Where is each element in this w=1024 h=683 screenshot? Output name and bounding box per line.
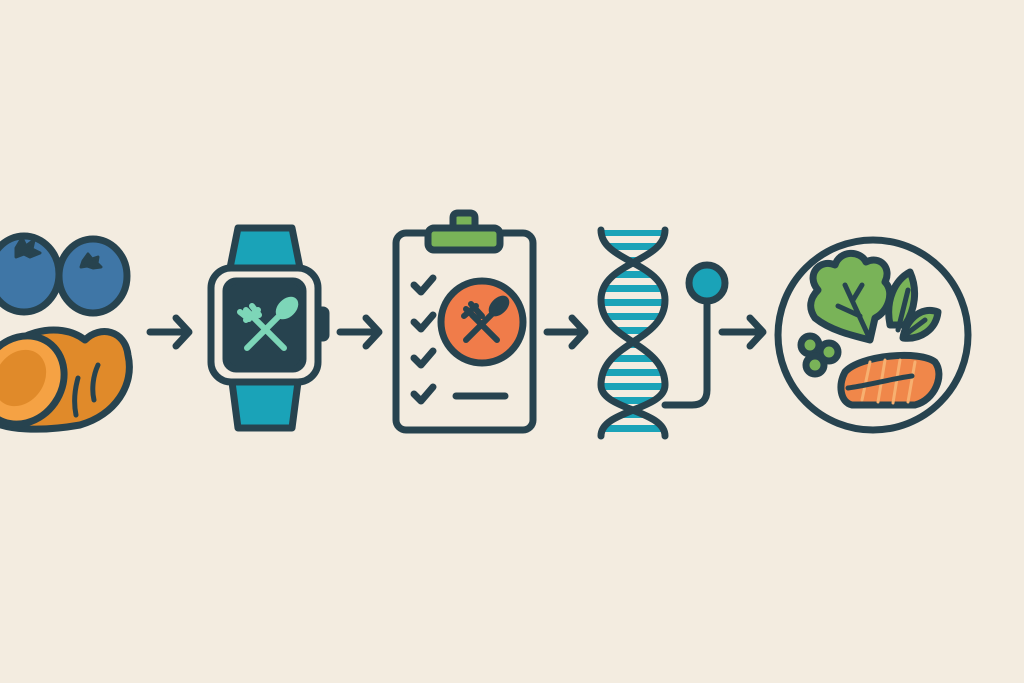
salmon: [841, 355, 939, 405]
arrow 1: [150, 318, 189, 346]
arrow 3: [547, 318, 585, 346]
fork and spoon: [240, 297, 298, 348]
icon: smartwatch: [211, 228, 326, 428]
blueberry left: [0, 236, 59, 312]
peas: [801, 336, 819, 354]
sweet potato: [0, 319, 129, 441]
greens: [811, 253, 890, 340]
icon: DNA with sensor: [601, 230, 725, 436]
icon: clipboard checklist: [396, 213, 533, 430]
arrow 2: [340, 318, 379, 346]
icon: blueberries and sweet potato: [0, 236, 129, 441]
arrow 4: [722, 318, 763, 346]
icon: plate with greens and salmon: [778, 240, 968, 430]
blueberry right: [59, 239, 127, 313]
